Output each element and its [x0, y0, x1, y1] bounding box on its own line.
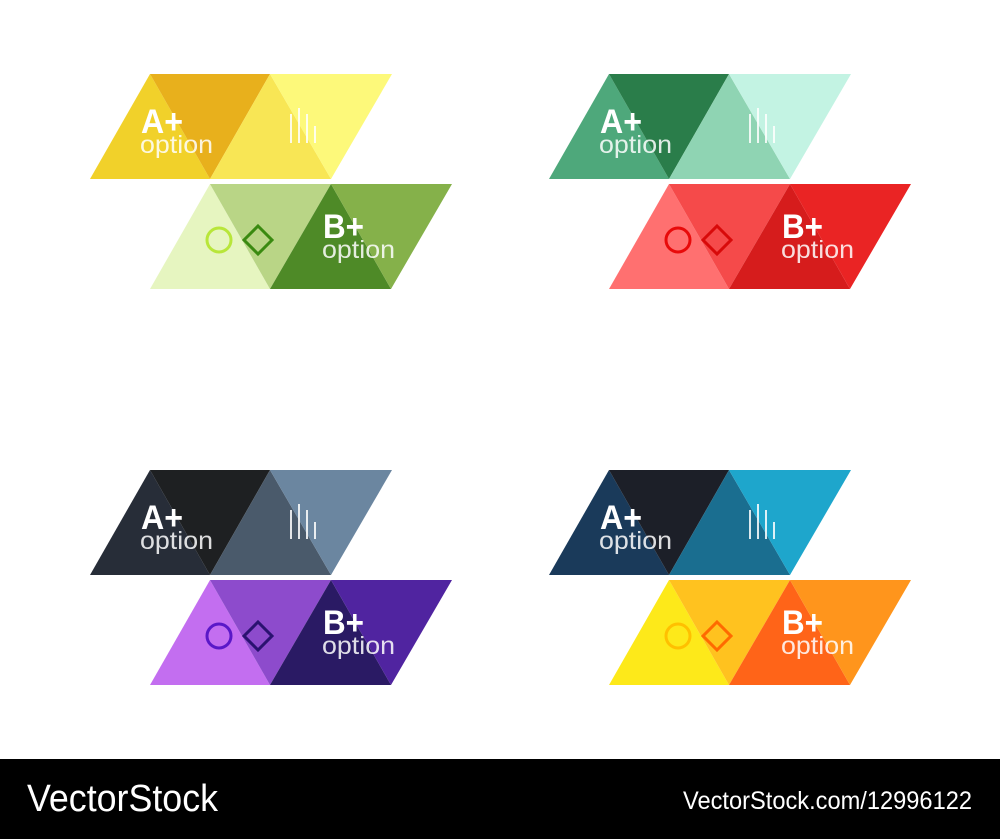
bottom band B [150, 184, 452, 289]
label A+ option [140, 103, 213, 159]
label B+ option [781, 604, 854, 660]
label B+ option [781, 208, 854, 264]
label B+ option: B+ [782, 604, 823, 642]
bottom band B [609, 580, 911, 685]
panel: yellow-green option group (top-left) [90, 74, 452, 289]
icons: circle and diamond [666, 622, 731, 650]
label A+ option: option [599, 131, 672, 159]
label B+ option: B+ [782, 208, 823, 246]
icon: bars [291, 504, 315, 539]
label A+ option: A+ [600, 499, 642, 537]
label B+ option: option [322, 236, 395, 264]
label B+ option: option [781, 236, 854, 264]
footer: image id: VectorStock.com/12996122 [683, 787, 972, 815]
label A+ option: A+ [141, 103, 183, 141]
icons: circle and diamond [207, 226, 272, 254]
label A+ option: A+ [600, 103, 642, 141]
top band A [90, 470, 392, 575]
panel: dark-purple option group (bottom-left) [90, 470, 452, 685]
label A+ option [140, 499, 213, 555]
label A+ option: option [140, 527, 213, 555]
top band A [90, 74, 392, 179]
label B+ option: option [322, 632, 395, 660]
icon: bars [291, 108, 315, 143]
label B+ option: B+ [323, 604, 364, 642]
panel: blue-orange option group (bottom-right) [549, 470, 911, 685]
label B+ option: B+ [323, 208, 364, 246]
bottom band B [609, 184, 911, 289]
bottom band B [150, 580, 452, 685]
label A+ option [599, 499, 672, 555]
label B+ option [322, 208, 395, 264]
icon: bars [750, 108, 774, 143]
label B+ option [322, 604, 395, 660]
icons: circle and diamond [666, 226, 731, 254]
label A+ option: option [140, 131, 213, 159]
label B+ option: option [781, 632, 854, 660]
icon: bars [750, 504, 774, 539]
top band A [549, 74, 851, 179]
icons: circle and diamond [207, 622, 272, 650]
panel: green-red option group (top-right) [549, 74, 911, 289]
footer: brand: VectorStock [27, 778, 219, 820]
top band A [549, 470, 851, 575]
label A+ option [599, 103, 672, 159]
label A+ option: option [599, 527, 672, 555]
label A+ option: A+ [141, 499, 183, 537]
footer bar [0, 759, 1000, 839]
